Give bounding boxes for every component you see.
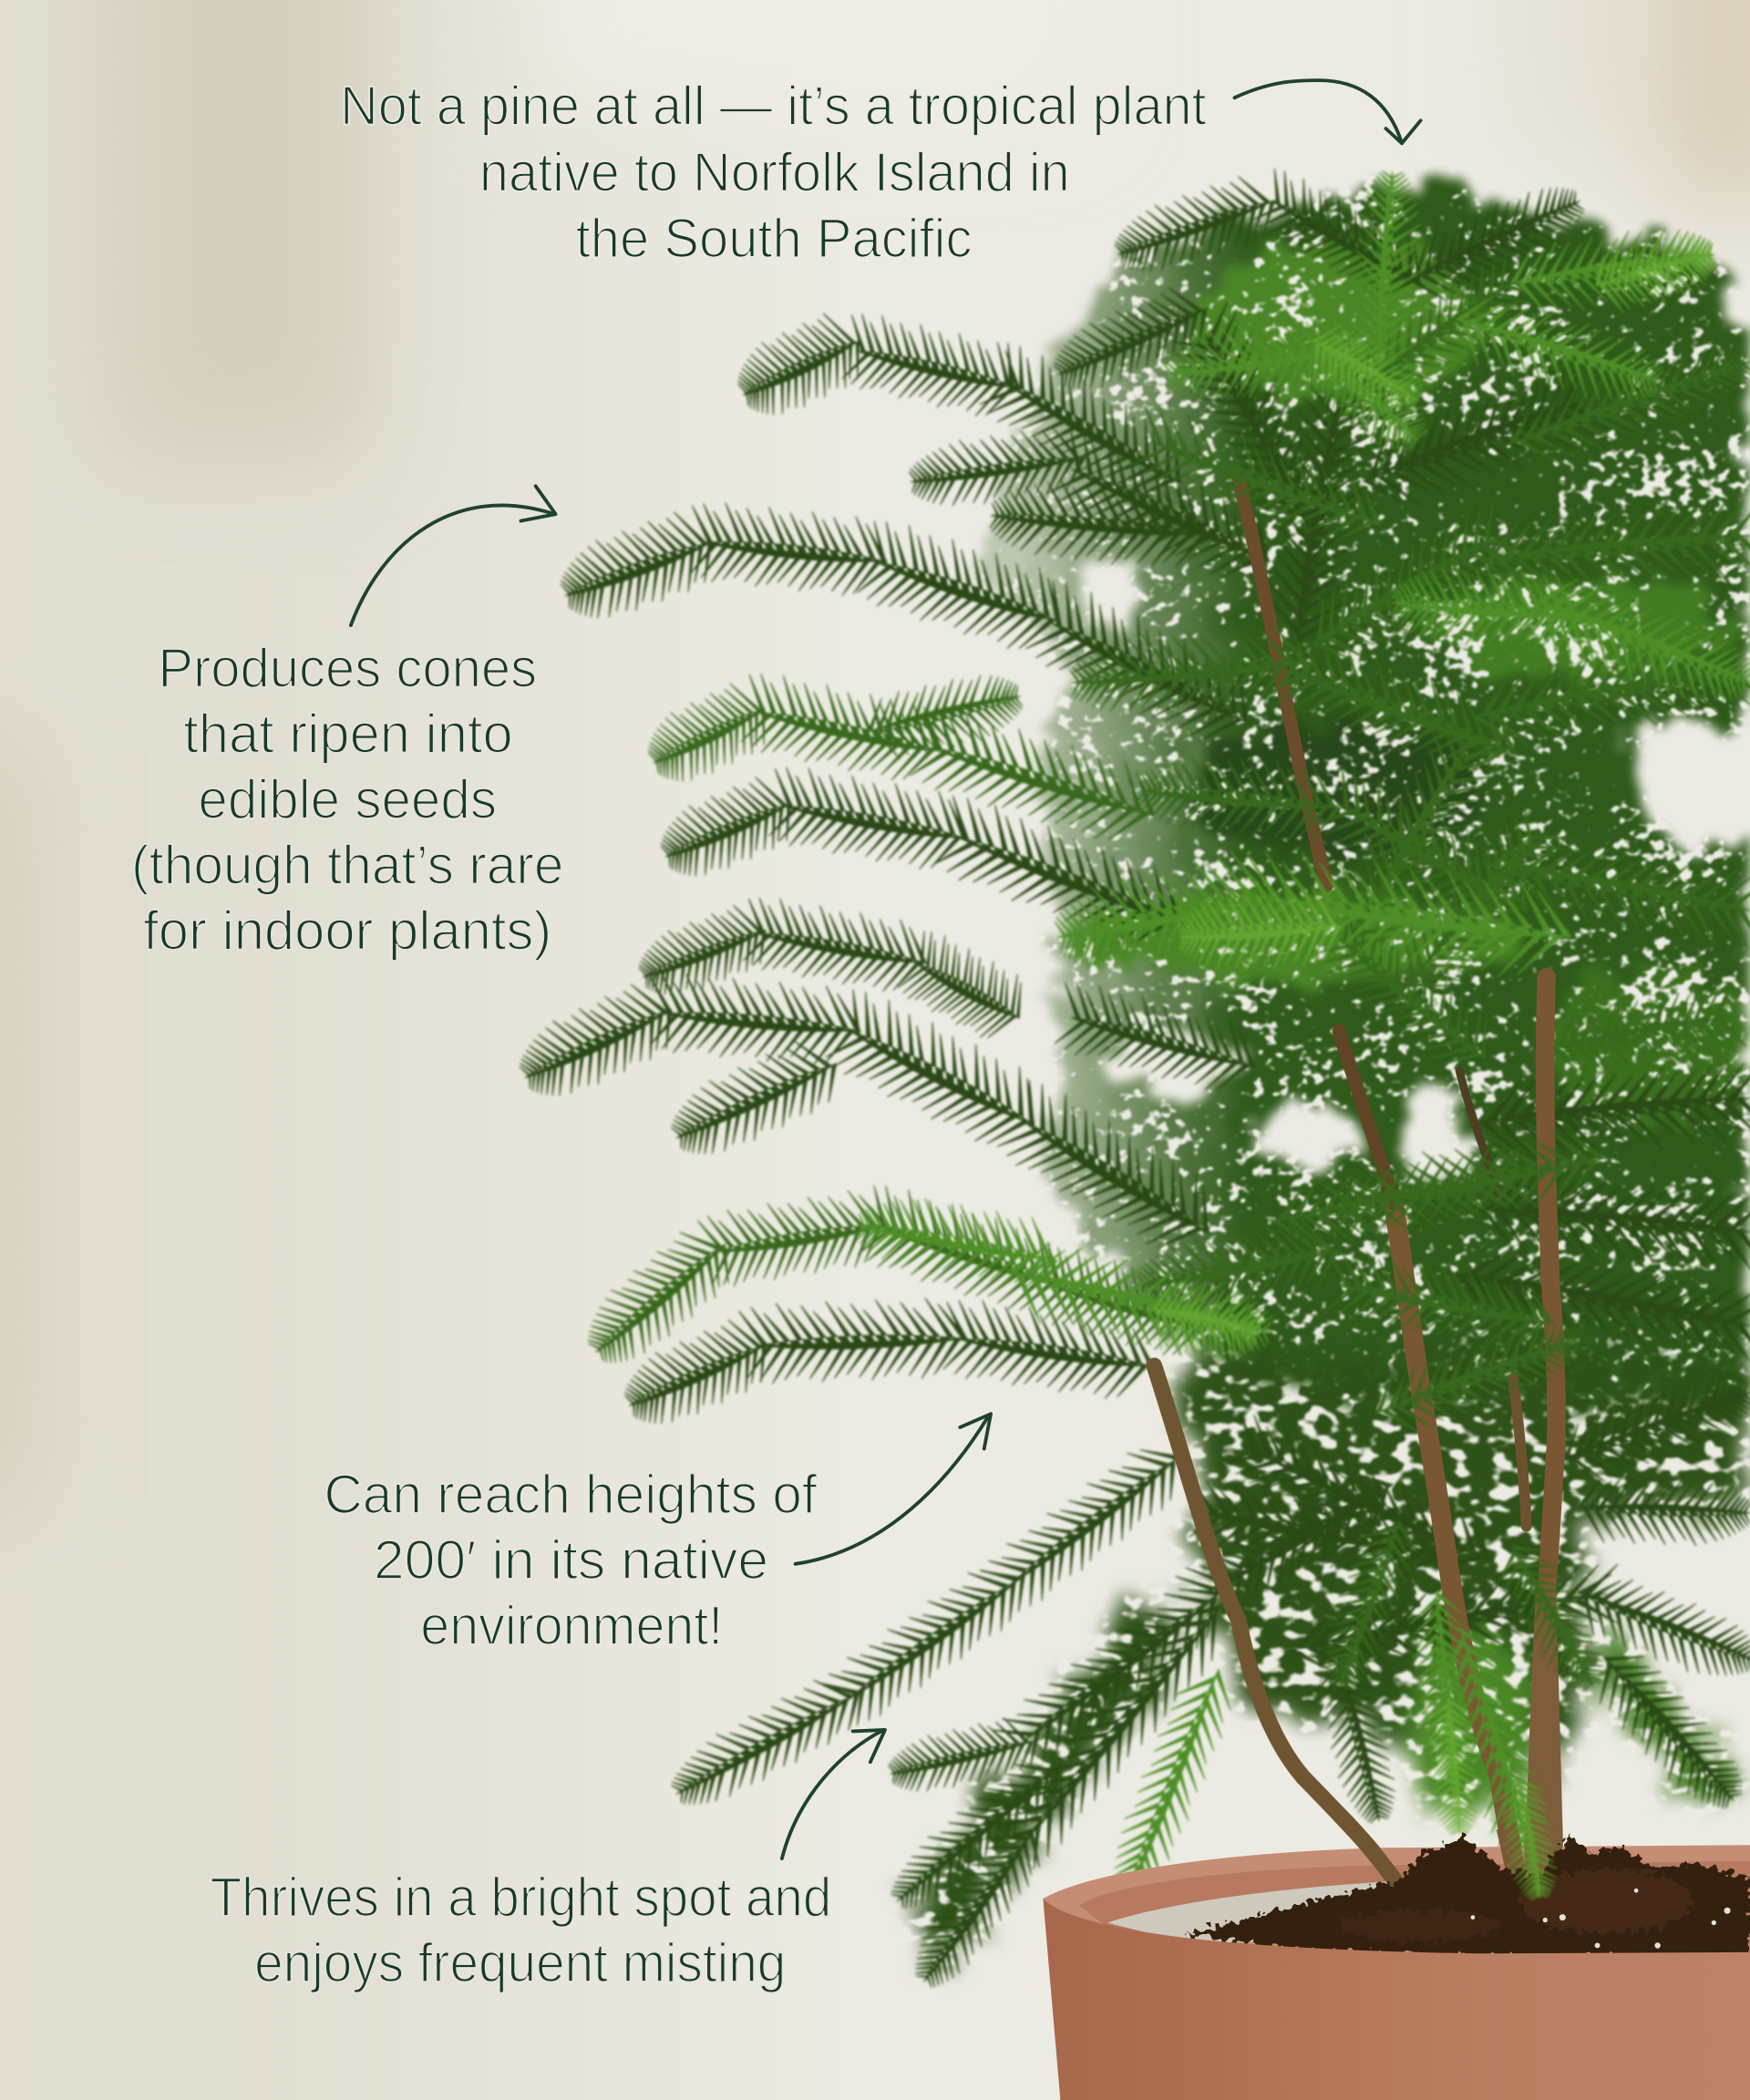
arrow: to upper branch — [351, 486, 556, 625]
text: produces cones: edible seeds — [198, 768, 497, 830]
text: produces cones: (though that’s rare — [131, 834, 563, 896]
text: not a pine — [340, 75, 1207, 269]
pot: terracotta planter with soil — [1043, 1774, 1750, 2100]
foliage mass: sparse lower canopy — [911, 1353, 1750, 1968]
text: produces cones — [131, 637, 563, 962]
foliage mass: speckled canopy — [971, 180, 1750, 1405]
text: not a pine: Not a pine at all — it’s a tropical plant — [340, 75, 1207, 137]
text: produces cones: Produces cones — [158, 637, 537, 699]
text: not a pine: native to Norfolk Island in — [479, 140, 1070, 202]
text: can reach heights: Can reach heights of — [324, 1463, 817, 1525]
stems entering soil — [1339, 1815, 1544, 1888]
text: not a pine: the South Pacific — [576, 207, 973, 269]
arrow: to top of plant — [1234, 80, 1421, 143]
text: thrives in a bright spot — [211, 1866, 831, 1993]
text: thrives in a bright spot: Thrives in a bright spot and — [211, 1866, 831, 1928]
pot liner — [1107, 1881, 1419, 1944]
pot inner wall — [1079, 1861, 1750, 1958]
text: produces cones: for indoor plants) — [143, 900, 551, 962]
pot body — [1043, 1899, 1750, 2100]
foliage: lime tips — [1144, 225, 1723, 1837]
lime sprig over soil — [1493, 1774, 1563, 1903]
foliage: mid-green branches — [571, 245, 1750, 1703]
soil — [1187, 1835, 1750, 1958]
arrow: to bottom branch — [782, 1730, 885, 1858]
foliage: dark back branches — [508, 164, 1750, 1999]
text: can reach heights: 200′ in its native — [374, 1529, 768, 1590]
stems: brown trunks — [1154, 483, 1564, 1888]
perlite — [1471, 1889, 1731, 1949]
text: thrives in a bright spot: enjoys frequent misting — [254, 1931, 786, 1993]
pot rim back — [1043, 1845, 1750, 1958]
text: can reach heights — [324, 1463, 817, 1656]
text: produces cones: that ripen into — [183, 703, 513, 765]
text: can reach heights: environment! — [420, 1594, 723, 1656]
plant: Norfolk Island pine — [508, 164, 1750, 1999]
arrow: to lower branch — [796, 1414, 991, 1564]
foliage: bright new growth — [850, 170, 1750, 1912]
